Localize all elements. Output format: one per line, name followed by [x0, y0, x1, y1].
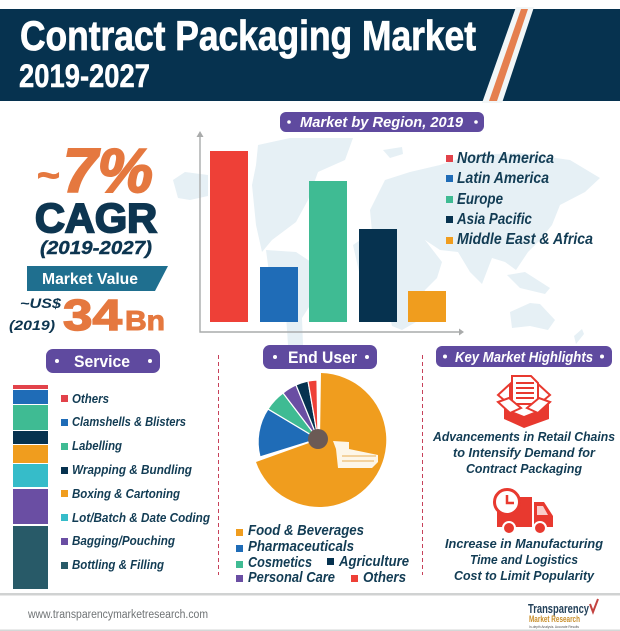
highlight text two: Cost to Limit Popularity: [454, 568, 595, 583]
footer url: www.transparencymarketresearch.com: [27, 609, 208, 621]
accent stripe: [482, 7, 534, 103]
service legend: Others: [72, 391, 109, 406]
service legend: Wrapping & Bundling: [72, 462, 192, 477]
market value band: Market Value: [42, 271, 138, 288]
bar chart: [196, 131, 464, 336]
region legend: Europe: [457, 191, 503, 208]
service legend: Labelling: [72, 438, 122, 453]
highlight text two: [445, 536, 603, 583]
market value band: [27, 266, 168, 291]
heading pill: [46, 349, 160, 373]
service legend: [61, 391, 210, 572]
logo: In-depth Analysis. Accurate Results: [529, 624, 579, 629]
pie chart: [256, 373, 386, 507]
end user legend: Cosmetics: [248, 554, 312, 571]
region legend: Asia Pacific: [456, 211, 532, 228]
highlight text two: Increase in Manufacturing: [445, 536, 603, 551]
icon: delivery truck with clock: [494, 490, 553, 534]
panel: key market highlights: [432, 346, 615, 583]
title: Contract Packaging Market: [20, 12, 476, 59]
region legend: [446, 150, 593, 248]
market value figure: [9, 291, 165, 340]
end user legend: Food & Beverages: [248, 522, 364, 539]
panel: market by region: [196, 112, 593, 336]
icon: food: [333, 441, 378, 468]
subtitle years: 2019-2027: [19, 58, 150, 94]
region legend: Middle East & Africa: [457, 231, 593, 248]
service legend: Lot/Batch & Date Coding: [72, 510, 210, 525]
growth rate: 7%: [63, 137, 153, 206]
region legend: North America: [457, 150, 554, 167]
market value figure: (2019): [9, 317, 55, 333]
highlight text one: [432, 429, 615, 476]
logo: Transparency: [528, 602, 589, 616]
stacked bar: [13, 385, 48, 589]
logo: Market Research: [529, 614, 580, 624]
heading pill: Market by Region, 2019: [300, 115, 463, 131]
end user legend: Others: [363, 569, 406, 586]
CAGR period: (2019-2027): [40, 238, 152, 258]
panel: service: [13, 349, 210, 589]
region legend: Latin America: [457, 170, 549, 187]
market value figure: 34: [63, 291, 123, 340]
service legend: Boxing & Cartoning: [72, 486, 180, 501]
CAGR label: CAGR: [35, 195, 157, 241]
highlight text one: Contract Packaging: [466, 461, 582, 476]
heading pill: End User: [288, 348, 357, 367]
end user legend: Agriculture: [338, 553, 409, 570]
highlight text one: to Intensify Demand for: [453, 445, 596, 460]
end user legend: Pharmaceuticals: [248, 538, 354, 555]
header banner: [0, 7, 620, 103]
service legend: Clamshells & Blisters: [72, 414, 186, 429]
market value figure: ~US$: [20, 295, 61, 311]
heading pill: Service: [74, 352, 130, 371]
world map background: [173, 138, 600, 345]
service legend: Bottling & Filling: [72, 557, 164, 572]
heading pill: [436, 346, 612, 367]
CAGR panel: [9, 137, 168, 340]
panel: end user: [236, 345, 409, 586]
end user legend: Personal Care: [248, 569, 335, 586]
growth rate: ~: [37, 155, 60, 197]
market value figure: Bn: [125, 305, 165, 336]
heading pill: [280, 112, 484, 132]
heading pill: [263, 345, 377, 369]
logo: [528, 599, 598, 629]
end user legend: [236, 522, 409, 586]
icon: box with documents: [498, 376, 550, 428]
highlight text two: Time and Logistics: [470, 552, 578, 567]
heading pill: Key Market Highlights: [455, 350, 593, 366]
service legend: Bagging/Pouching: [72, 533, 175, 548]
